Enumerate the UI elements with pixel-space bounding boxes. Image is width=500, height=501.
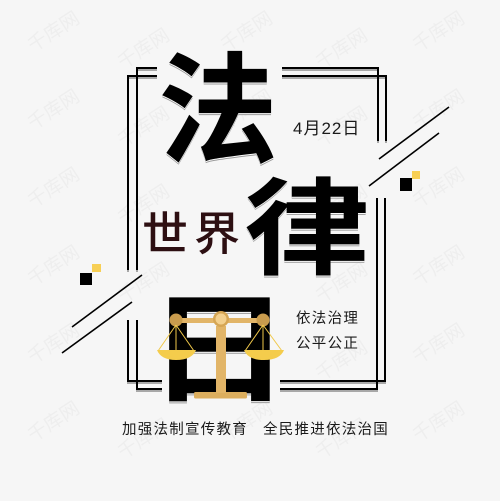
watermark pattern: 千库网	[312, 24, 372, 74]
watermark pattern: 千库网	[24, 241, 84, 291]
heading: world: 世界	[142, 208, 246, 260]
bottom slogan right: 全民推进依法治国	[263, 420, 389, 438]
watermark pattern: 千库网	[409, 7, 469, 57]
watermark pattern: 千库网	[312, 414, 372, 464]
decorative squares lower left	[80, 264, 101, 285]
diagonal lines lower left	[62, 275, 142, 353]
diagonal lines upper right	[369, 107, 449, 186]
watermark pattern: 千库网	[114, 24, 174, 74]
bottom slogan left: 加强法制宣传教育	[122, 421, 248, 438]
watermark pattern: 千库网	[24, 7, 84, 57]
date: 4月22日	[293, 119, 360, 138]
watermark pattern: 千库网	[114, 180, 174, 230]
slogan: rule of law: 依法治理	[296, 310, 359, 327]
watermark pattern: 千库网	[24, 85, 84, 135]
watermark pattern: 千库网	[312, 180, 372, 230]
watermark pattern: 千库网	[409, 85, 469, 135]
watermark pattern: 千库网	[409, 397, 469, 447]
watermark pattern: 千库网	[114, 258, 174, 308]
watermark pattern: 千库网	[409, 163, 469, 213]
decorative squares upper right	[400, 171, 420, 191]
watermark pattern: 千库网	[24, 397, 84, 447]
icon: golden scales	[157, 311, 284, 398]
watermark pattern: 千库网	[24, 319, 84, 369]
watermark pattern: 千库网	[217, 85, 277, 135]
watermark pattern: 千库网	[217, 397, 277, 447]
watermark pattern: 千库网	[409, 319, 469, 369]
big character: law lv: 律	[244, 171, 369, 289]
double line frame	[128, 68, 386, 389]
watermark pattern: 千库网	[312, 102, 372, 152]
big character: day ri: 日	[147, 284, 291, 418]
watermark pattern: 千库网	[24, 163, 84, 213]
watermark pattern: 千库网	[114, 414, 174, 464]
watermark pattern: 千库网	[312, 336, 372, 386]
watermark pattern: 千库网	[114, 102, 174, 152]
watermark pattern: 千库网	[312, 258, 372, 308]
watermark pattern: 千库网	[217, 7, 277, 57]
big character: law fa: 法	[158, 45, 278, 179]
watermark pattern: 千库网	[409, 241, 469, 291]
slogan: fairness: 公平公正	[296, 336, 359, 352]
